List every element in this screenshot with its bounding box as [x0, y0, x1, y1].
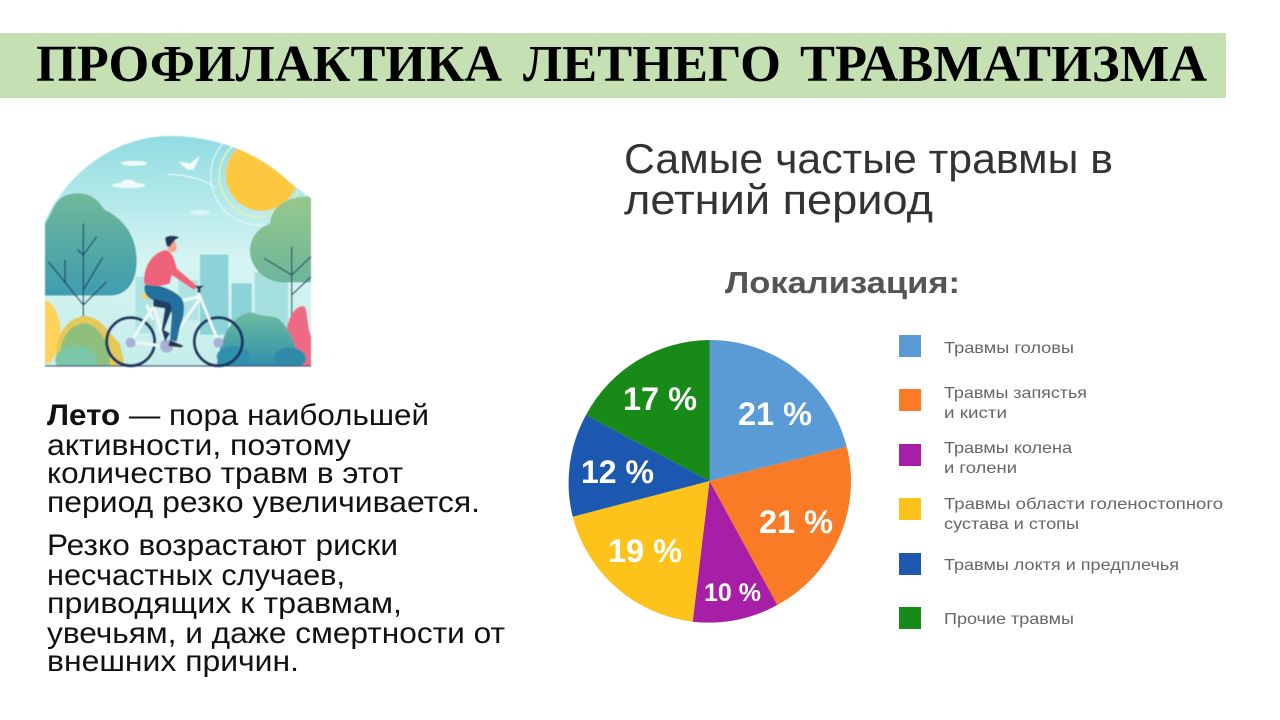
pie labels: 19 % — [608, 533, 682, 569]
legend item: knee — [899, 440, 1072, 477]
intro paragraph: Лето — пора наибольшей — [47, 399, 429, 432]
ground line — [45, 365, 312, 368]
legend — [899, 335, 1223, 629]
slice: wrist 21% — [710, 447, 851, 605]
clouds and bird — [112, 156, 217, 216]
legend item: elbow: Травмы локтя и предплечья — [944, 557, 1179, 574]
title: ПРОФИЛАКТИКА — [36, 36, 502, 93]
legend item: ankle: Травмы области голеностопного — [944, 496, 1223, 513]
pie labels: 10 % — [704, 579, 761, 607]
sky — [45, 133, 312, 367]
right bushes — [217, 306, 311, 369]
pie labels: 21 % — [759, 504, 833, 540]
risks paragraph: Резко возрастают риски — [47, 529, 398, 562]
bicycle — [107, 287, 242, 366]
legend item: wrist — [899, 385, 1087, 422]
legend item: other: Прочие травмы — [944, 611, 1074, 628]
pie labels: 12 % — [581, 454, 654, 490]
chart heading — [624, 135, 1113, 223]
title: ЛЕТНЕГО — [523, 36, 781, 93]
legend item: ankle — [899, 496, 1223, 533]
chart heading: Самые частые травмы в — [624, 135, 1113, 182]
pie chart — [569, 340, 851, 623]
legend item: knee: и голени — [944, 460, 1017, 477]
legend item: ankle: сустава и стопы — [944, 516, 1079, 533]
intro paragraph: количество травм в этот — [47, 457, 403, 490]
legend item: knee: Травмы колена — [944, 440, 1072, 457]
risks paragraph: приводящих к травмам, — [47, 587, 402, 620]
legend item: wrist: и кисти — [944, 405, 1007, 422]
risks paragraph: внешних причин. — [47, 645, 299, 678]
slice: ankle 19% — [573, 481, 710, 622]
cyclist — [144, 236, 204, 348]
right tree — [250, 196, 311, 330]
risks paragraph: несчастных случаев, — [47, 559, 345, 592]
intro paragraph: период резко увеличивается. — [47, 486, 480, 519]
slice: head 21% — [710, 340, 847, 481]
legend item: head — [899, 335, 1074, 357]
title: ТРАВМАТИЗМА — [800, 36, 1207, 93]
illustration: cyclist in a summer park — [45, 127, 312, 375]
legend item: head: Травмы головы — [944, 340, 1074, 357]
sun — [210, 143, 306, 226]
title band — [0, 33, 1226, 98]
intro paragraph: активности, поэтому — [47, 429, 351, 462]
intro paragraph — [47, 399, 480, 519]
risks paragraph: увечьям, и даже смертности от — [47, 617, 505, 650]
legend item: other — [899, 607, 1074, 629]
pie labels: 17 % — [623, 381, 697, 417]
chart title: Локализация: — [725, 265, 960, 300]
risks paragraph — [47, 529, 505, 678]
title — [36, 36, 1207, 93]
chart heading: летний период — [624, 176, 933, 223]
left bushes — [45, 300, 125, 375]
pie labels: 21 % — [738, 396, 812, 432]
slice: elbow 12% — [569, 415, 710, 517]
left tree — [44, 192, 138, 317]
legend item: elbow — [899, 553, 1179, 575]
slice: other 17% — [586, 340, 710, 481]
pie labels — [581, 381, 833, 607]
legend item: wrist: Травмы запястья — [944, 385, 1087, 402]
slice: knee 10% — [693, 481, 777, 623]
city buildings — [135, 255, 288, 335]
